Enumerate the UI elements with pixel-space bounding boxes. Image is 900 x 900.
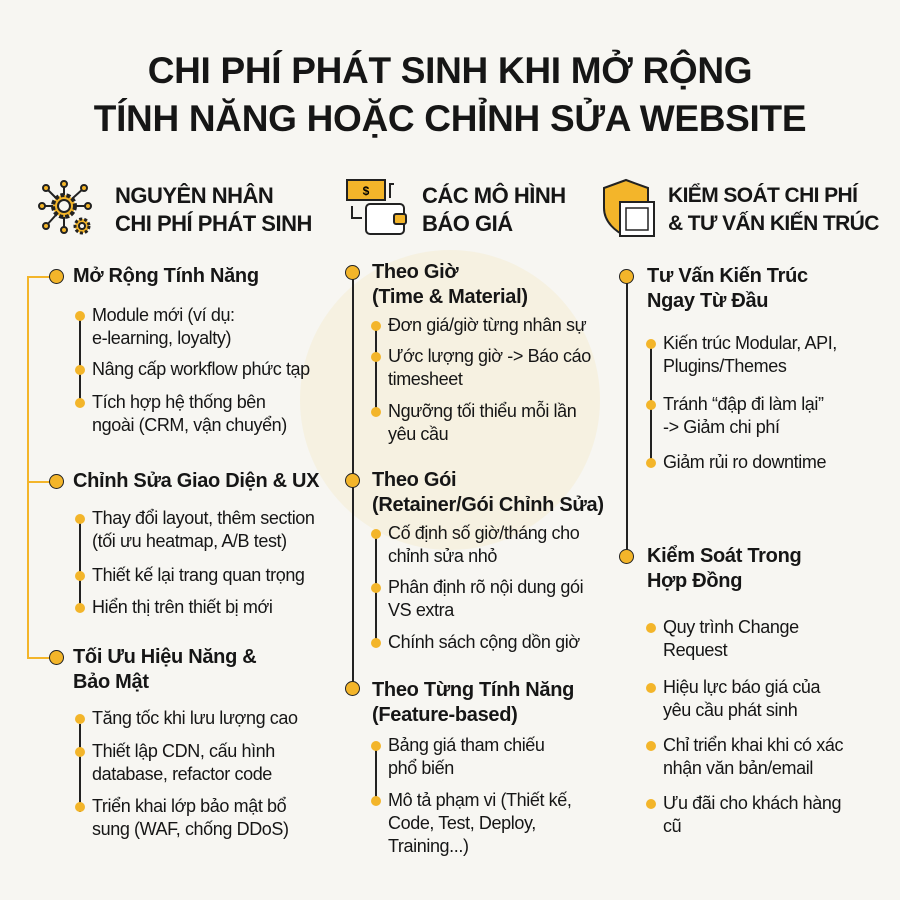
- group: Kiểm Soát Hợp Đồng: cũ: [663, 816, 681, 836]
- heading: pricing models: [422, 182, 566, 236]
- heading: pricing models: BÁO GIÁ: [422, 211, 513, 236]
- group: Kiểm Soát Hợp Đồng: Hiệu lực báo giá của: [663, 677, 820, 697]
- group: Kiểm Soát Hợp Đồng: nhận văn bản/email: [663, 758, 813, 778]
- group: Chỉnh Sửa Giao Diện: [49, 470, 320, 617]
- group: Theo Từng Tính Năng: Code, Test, Deploy,: [388, 813, 536, 833]
- title: TÍNH NĂNG HOẶC CHỈNH SỬA WEBSITE: [94, 98, 806, 139]
- group: Mở Rộng Tính Năng: ngoài (CRM, vận chuyển): [92, 415, 287, 435]
- group: Theo Giờ: timesheet: [388, 369, 462, 389]
- group: Theo Gói: chỉnh sửa nhỏ: [388, 546, 497, 566]
- group: Theo Từng Tính Năng: Theo Từng Tính Năng: [372, 679, 574, 701]
- group: Kiểm Soát Hợp Đồng: Hợp Đồng: [647, 570, 742, 592]
- group: Tư Vấn Kiến Trúc: -> Giảm chi phí: [663, 417, 780, 437]
- group: Theo Giờ: Đơn giá/giờ từng nhân sự: [388, 315, 586, 335]
- heading: causes: NGUYÊN NHÂN: [115, 183, 273, 208]
- group: Theo Giờ: Ngưỡng tối thiểu mỗi lần: [388, 401, 576, 421]
- group: Tối Ưu Hiệu Năng: Tăng tốc khi lưu lượng cao: [92, 708, 298, 728]
- group: Tối Ưu Hiệu Năng: Tối Ưu Hiệu Năng &: [73, 646, 256, 668]
- group: Tư Vấn Kiến Trúc: Kiến trúc Modular, API,: [663, 333, 837, 353]
- group: Mở Rộng Tính Năng: Tích hợp hệ thống bên: [92, 392, 266, 412]
- group: Chỉnh Sửa Giao Diện: Hiển thị trên thiết bị mới: [92, 597, 272, 617]
- group: Theo Giờ: Ước lượng giờ -> Báo cáo: [388, 346, 591, 366]
- heading: pricing models: CÁC MÔ HÌNH: [422, 183, 566, 208]
- group: Theo Từng Tính Năng: (Feature-based): [372, 704, 518, 726]
- group: Kiểm Soát Hợp Đồng: Request: [663, 640, 727, 660]
- group: Tư Vấn Kiến Trúc: Ngay Từ Đầu: [647, 290, 768, 312]
- group: Chỉnh Sửa Giao Diện: Chỉnh Sửa Giao Diện & UX: [73, 470, 319, 492]
- group: Chỉnh Sửa Giao Diện: Thiết kế lại trang quan trọng: [92, 565, 305, 585]
- title: CHI PHÍ PHÁT SINH KHI MỞ RỘNG: [148, 50, 752, 91]
- group: Chỉnh Sửa Giao Diện: (tối ưu heatmap, A/B test): [92, 531, 287, 551]
- group: Tối Ưu Hiệu Năng: Triển khai lớp bảo mật bổ: [92, 796, 286, 816]
- group: Theo Từng Tính Năng: phổ biến: [388, 758, 454, 778]
- group: Tối Ưu Hiệu Năng: Bảo Mật: [73, 671, 149, 693]
- group: Mở Rộng Tính Năng: Module mới (ví dụ:: [92, 305, 235, 325]
- group: Theo Giờ: (Time & Material): [372, 286, 528, 308]
- group: Kiểm Soát Hợp Đồng: Quy trình Change: [663, 617, 799, 637]
- group: Theo Gói: (Retainer/Gói Chỉnh Sửa): [372, 494, 604, 516]
- group: Tư Vấn Kiến Trúc: Tư Vấn Kiến Trúc: [647, 265, 808, 287]
- heading: cost control: [668, 183, 879, 235]
- panel: cost control: [619, 265, 843, 836]
- group: Tư Vấn Kiến Trúc: Tránh “đập đi làm lại”: [663, 394, 824, 414]
- group: Mở Rộng Tính Năng: e-learning, loyalty): [92, 328, 231, 348]
- group: Theo Gói: [345, 469, 604, 652]
- group: Theo Gói: Chính sách cộng dồn giờ: [388, 632, 580, 652]
- heading: causes: [115, 183, 312, 236]
- group: Tư Vấn Kiến Trúc: [619, 265, 837, 472]
- icon: money wallet: $: [363, 184, 370, 198]
- panel: causes: [27, 265, 320, 839]
- heading: cost control: & TƯ VẤN KIẾN TRÚC: [668, 212, 879, 235]
- group: Tư Vấn Kiến Trúc: Giảm rủi ro downtime: [663, 452, 826, 472]
- group: Tối Ưu Hiệu Năng: Thiết lập CDN, cấu hình: [92, 741, 275, 761]
- icon: network gears: [38, 180, 92, 234]
- watermark: [300, 250, 600, 550]
- group: Theo Giờ: yêu cầu: [388, 424, 448, 444]
- group: Theo Từng Tính Năng: Mô tả phạm vi (Thiết kế,: [388, 790, 571, 810]
- group: Theo Gói: VS extra: [388, 600, 454, 620]
- group: Kiểm Soát Hợp Đồng: Ưu đãi cho khách hàng: [663, 793, 841, 813]
- icon: shield blueprint: [603, 178, 655, 238]
- group: Kiểm Soát Hợp Đồng: [619, 545, 843, 836]
- group: Tư Vấn Kiến Trúc: Plugins/Themes: [663, 356, 786, 376]
- group: Mở Rộng Tính Năng: Nâng cấp workflow phức tạp: [92, 359, 310, 379]
- group: Tối Ưu Hiệu Năng: [49, 646, 298, 839]
- group: Theo Từng Tính Năng: Bảng giá tham chiếu: [388, 735, 545, 755]
- group: Theo Từng Tính Năng: Training...): [388, 836, 469, 856]
- title: [94, 50, 806, 139]
- group: Kiểm Soát Hợp Đồng: Kiểm Soát Trong: [647, 545, 801, 567]
- group: Tối Ưu Hiệu Năng: database, refactor code: [92, 764, 272, 784]
- group: Kiểm Soát Hợp Đồng: yêu cầu phát sinh: [663, 700, 797, 720]
- group: Theo Gói: Theo Gói: [372, 469, 456, 491]
- group: Kiểm Soát Hợp Đồng: Chỉ triển khai khi có xác: [663, 735, 843, 755]
- group: Theo Giờ: Theo Giờ: [372, 261, 458, 283]
- group: Theo Gói: Cố định số giờ/tháng cho: [388, 523, 579, 543]
- group: Chỉnh Sửa Giao Diện: Thay đổi layout, thêm section: [92, 508, 315, 528]
- group: Theo Từng Tính Năng: [345, 679, 574, 856]
- panel: pricing models: [345, 261, 604, 856]
- group: Mở Rộng Tính Năng: [49, 265, 310, 435]
- group: Tối Ưu Hiệu Năng: sung (WAF, chống DDoS): [92, 819, 289, 839]
- group: Theo Gói: Phân định rõ nội dung gói: [388, 577, 583, 597]
- heading: cost control: KIỂM SOÁT CHI PHÍ: [668, 184, 857, 207]
- icon: money wallet: [346, 179, 407, 235]
- group: Theo Giờ: [345, 261, 591, 444]
- heading: causes: CHI PHÍ PHÁT SINH: [115, 211, 312, 236]
- group: Mở Rộng Tính Năng: Mở Rộng Tính Năng: [73, 265, 259, 287]
